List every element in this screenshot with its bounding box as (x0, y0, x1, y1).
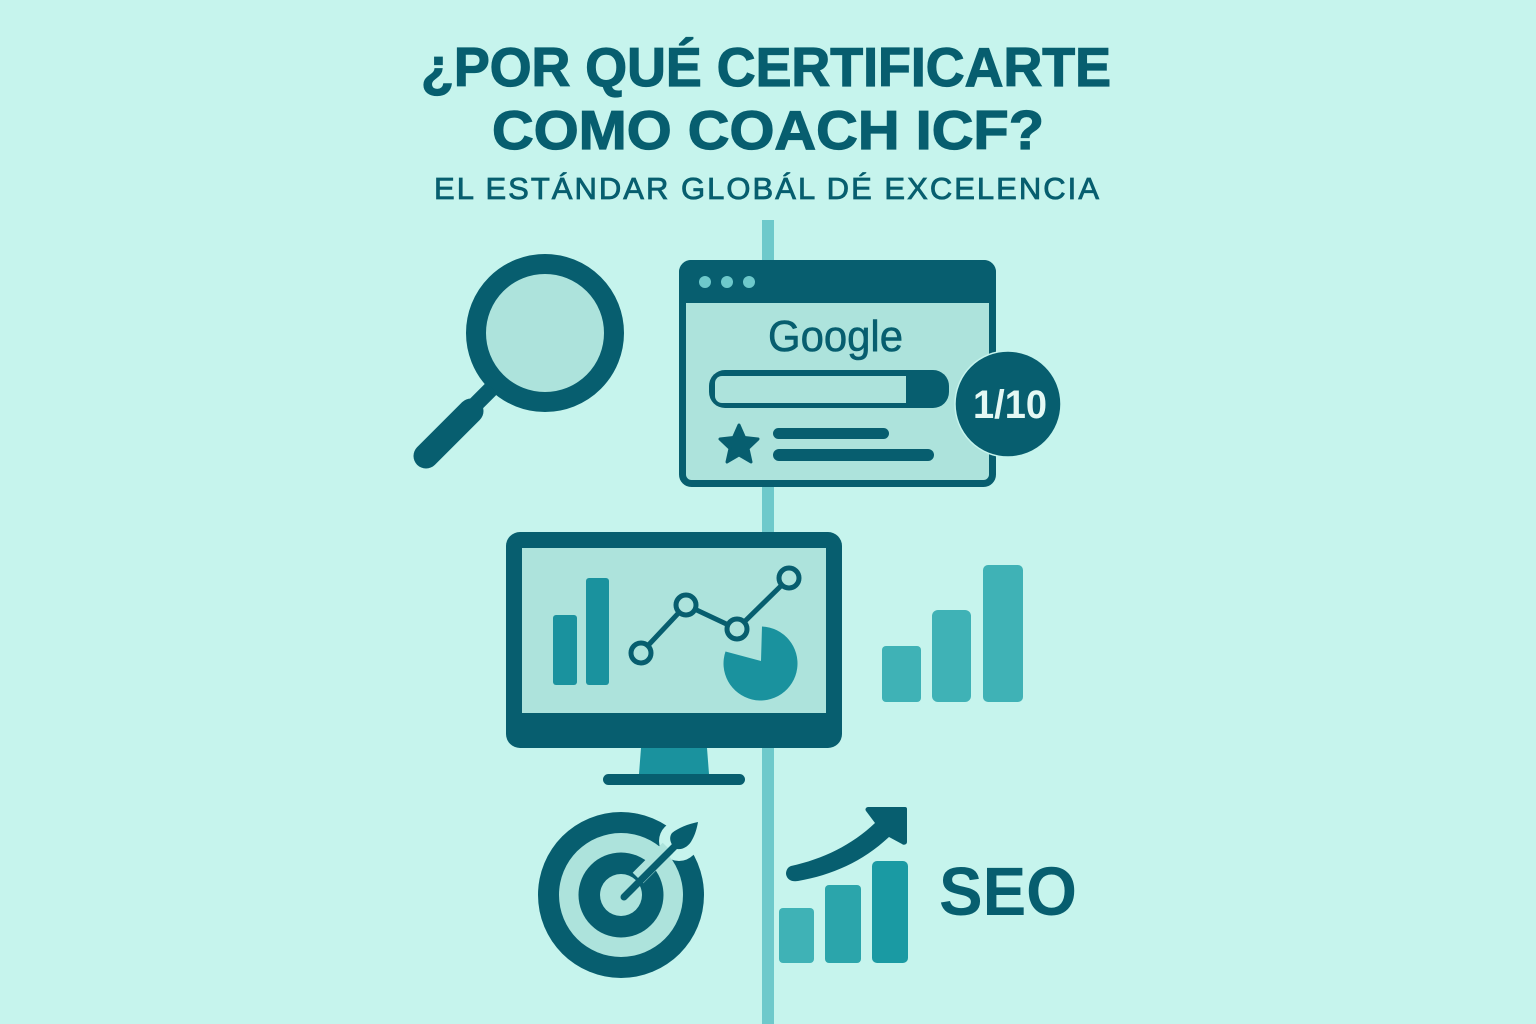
icon: monitor with charts (506, 532, 842, 785)
screen line chart (631, 568, 799, 663)
screen bars (553, 578, 609, 685)
subtitle: EL ESTÁNDAR GLOBÁL DÉ EXCELENCIA (434, 171, 1099, 206)
arrow (624, 841, 680, 897)
growth arrow (786, 807, 907, 881)
monitor stand (639, 748, 709, 774)
icon: growth bars with arrow (779, 807, 908, 963)
title: COMO COACH ICF? (492, 99, 1044, 161)
monitor frame (506, 532, 842, 748)
title: ¿POR QUÉ CERTIFICARTE (421, 36, 1111, 98)
icon: target with arrow (538, 812, 704, 978)
browser title bar (679, 260, 996, 303)
window dots (699, 276, 755, 288)
Google wordmark: Google (768, 312, 903, 361)
result lines (773, 428, 934, 461)
panel: Google browser window (679, 260, 996, 484)
icon: magnifying glass (426, 264, 614, 456)
outer ring notch (659, 821, 699, 861)
inner ring notch along arrow (638, 848, 668, 878)
badge: 1/10 (955, 351, 1061, 457)
search bar (709, 370, 949, 408)
screen pie chart (724, 626, 798, 700)
bar chart: right of monitor (882, 565, 1023, 702)
label: SEO: SEO (939, 853, 1077, 930)
title (421, 36, 1111, 161)
icon: star (720, 425, 758, 462)
central vertical line (762, 220, 774, 1024)
badge: 1/10: 1/10 (973, 383, 1047, 427)
